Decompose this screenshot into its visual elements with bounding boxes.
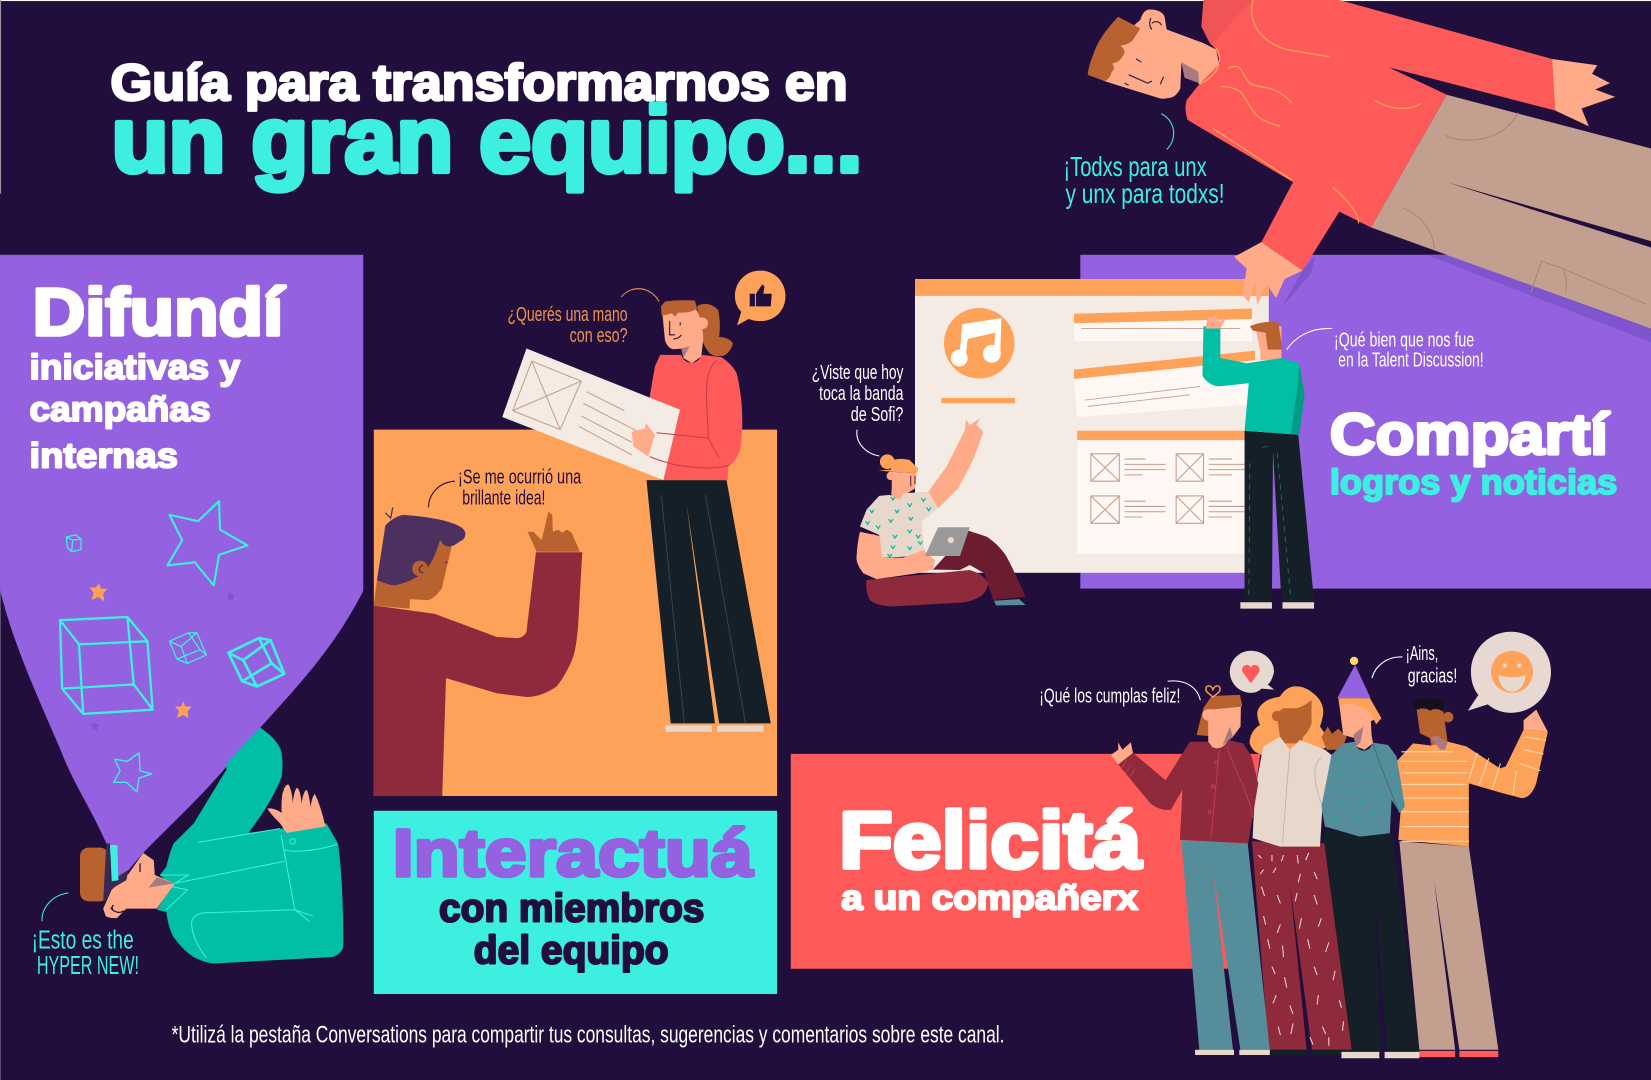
heading: Difundí: campañas xyxy=(29,391,211,429)
heading: Felicitá: a un compañerx xyxy=(841,880,1139,918)
person: curly hair xyxy=(1250,686,1352,1055)
callout: Ains, gracias: gracias! xyxy=(1408,665,1457,687)
heading: Felicitá: Felicitá xyxy=(839,796,1142,885)
title: Guía para transformarnos en xyxy=(111,54,848,111)
character: man in orange panel: ¡Se me ocurrió una xyxy=(458,466,582,488)
heading: Difundí: internas xyxy=(29,438,178,476)
callout: Ains, gracias: ¡Ains, xyxy=(1406,643,1438,665)
heading: Difundí xyxy=(29,276,286,476)
person: maroon shirt xyxy=(1111,686,1270,1055)
icons: floating stars and cubes xyxy=(60,501,284,792)
music app window xyxy=(915,279,1269,573)
character: seated girl with laptop: de Sofi? xyxy=(851,404,903,426)
person: party hat xyxy=(1321,657,1419,1058)
character: man in teal shirt at window: ¡Qué bien que nos fue xyxy=(1334,329,1474,351)
heading: Difundí: iniciativas y xyxy=(29,349,241,387)
callout: Ains, gracias xyxy=(1372,643,1457,687)
panel: Interactuá xyxy=(374,811,777,994)
character: man in teal shirt at window xyxy=(1202,313,1484,609)
character: man in teal shirt at window: en la Talent Discussion! xyxy=(1338,349,1484,371)
group of four colleagues celebrating xyxy=(1111,657,1548,1058)
character: person with VR headset: ¡Esto es the xyxy=(32,925,134,955)
character: seated girl with laptop: ¿Viste que hoy xyxy=(812,362,903,384)
big character leaning from top right: y unx para todxs! xyxy=(1066,178,1225,209)
big character lower hand over window xyxy=(1234,242,1315,307)
speech bubble: smile xyxy=(1468,632,1551,713)
title: un gran equipo... xyxy=(112,88,862,192)
person: striped sweater xyxy=(1397,699,1548,1057)
character: man in orange panel xyxy=(374,466,582,796)
character: seated girl with laptop: toca la banda xyxy=(819,383,904,405)
panel: Compartí background xyxy=(1080,255,1651,589)
icon: music note xyxy=(944,308,1015,379)
callout: Qué los cumplas feliz: ¡Qué los cumplas feliz! xyxy=(1039,685,1180,707)
panel: Felicitá background xyxy=(791,754,1260,969)
speech bubble: heart xyxy=(1230,651,1274,693)
big character leaning from top right: ¡Todxs para unx xyxy=(1063,151,1207,182)
panel: Interactuá orange illustration background xyxy=(374,430,777,796)
panel: Difundí projection beam xyxy=(0,255,363,880)
heading: Compartí xyxy=(1330,403,1617,502)
panel: Interactuá: con miembros xyxy=(439,886,704,930)
heading: Difundí: Difundí xyxy=(33,276,286,350)
heading: Compartí: logros y noticias xyxy=(1330,464,1617,502)
character: person with VR headset xyxy=(32,728,343,980)
character: man in orange panel: brillante idea! xyxy=(462,487,545,509)
character: woman holding wireframe: ¿Querés una mano xyxy=(508,304,628,326)
icon: thumbs-up bubble xyxy=(735,271,785,325)
panel: Interactuá: Interactuá xyxy=(393,817,754,891)
heading: Compartí: Compartí xyxy=(1330,403,1610,467)
big character leaning from top right xyxy=(1063,0,1651,342)
character: seated girl with laptop xyxy=(812,362,1026,606)
heading: Felicitá xyxy=(839,796,1142,918)
footnote: *Utilizá la pestaña Conversations para compartir tus consultas, sugerencias y comentarios sobre este canal. xyxy=(172,1021,1004,1048)
panel: Interactuá: del equipo xyxy=(474,928,669,972)
character: woman holding wireframe: con eso? xyxy=(570,325,628,347)
character: person with VR headset: HYPER NEW! xyxy=(37,950,139,980)
character: woman holding wireframe xyxy=(502,271,785,732)
callout: Qué los cumplas feliz xyxy=(1039,681,1200,707)
